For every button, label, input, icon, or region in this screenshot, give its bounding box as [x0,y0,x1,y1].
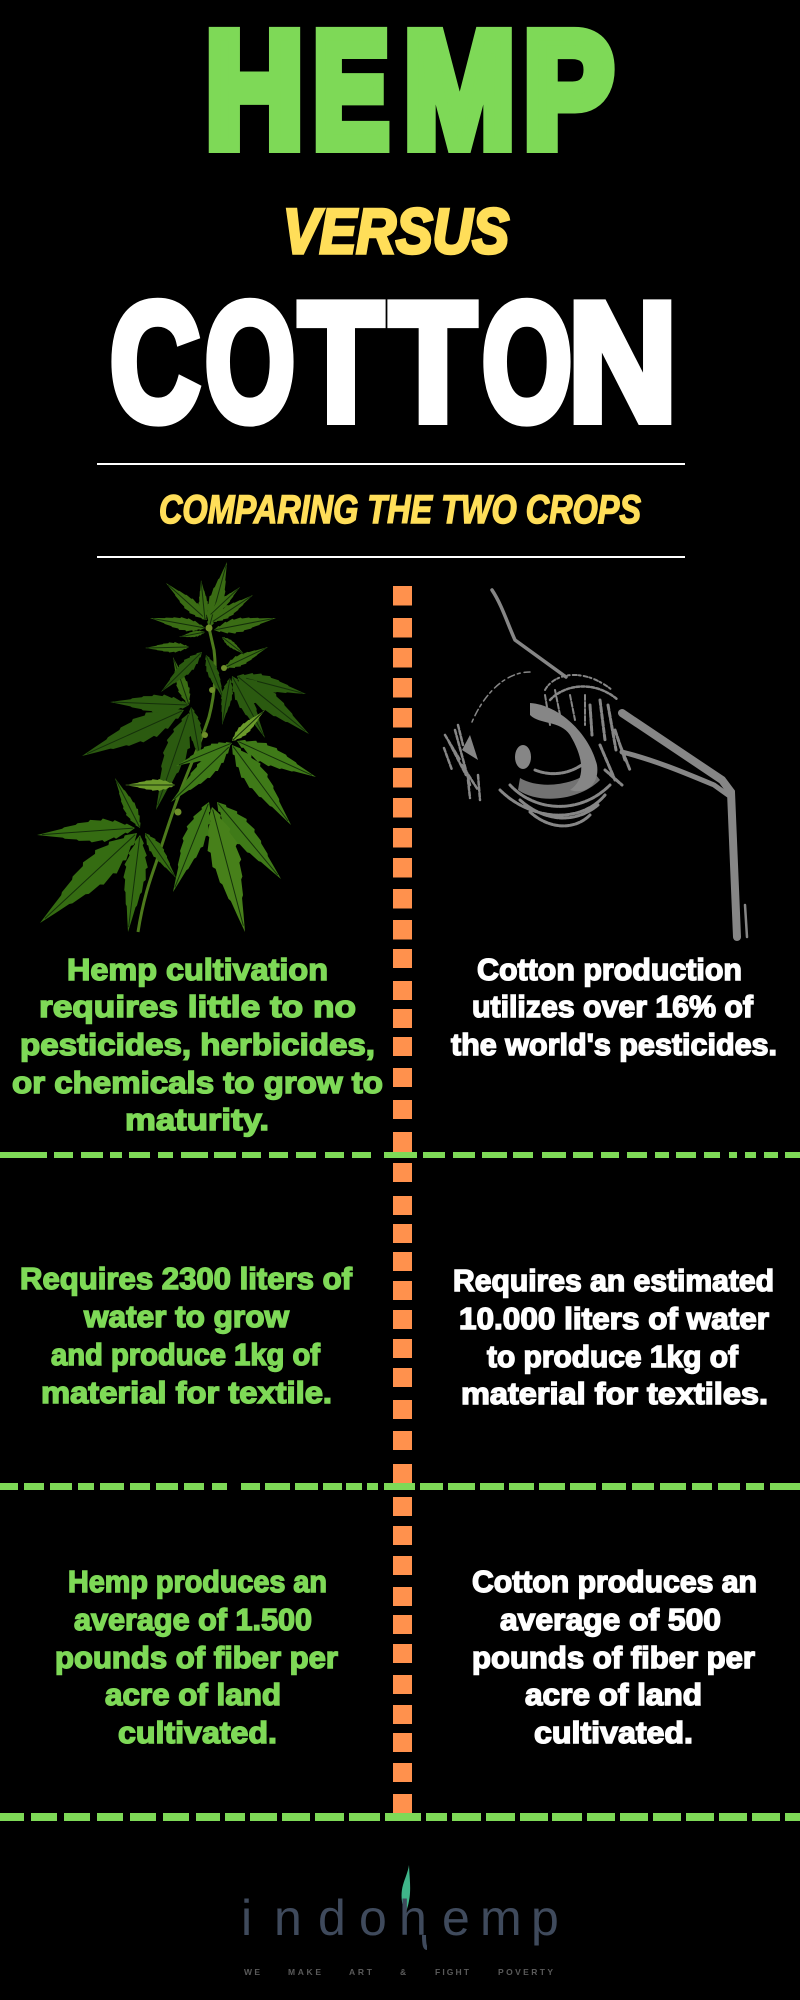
text: hemp fiber yield: pounds of fiber per [55,1640,338,1675]
text: cotton fiber yield [472,1564,757,1750]
logo tagline: WE [244,1967,260,1977]
logo tagline: MAKE [288,1967,321,1977]
green dashed row separator 2 [0,1483,800,1490]
divider: above subtitle [97,463,685,465]
logo: indohemp [241,1865,559,1977]
title: HEMP: H [206,0,304,181]
title: COTTON: C [110,268,200,456]
text: hemp pesticides: requires little to no [39,989,356,1024]
divider: below subtitle [97,556,685,558]
text: hemp pesticides: pesticides, herbicides, [20,1027,375,1062]
title: COTTON: N [568,268,677,456]
text: hemp pesticides: maturity. [125,1102,269,1137]
text: cotton pesticides: utilizes over 16% of [472,989,754,1024]
text: hemp water: water to grow [83,1299,290,1334]
text: hemp water [20,1261,353,1410]
title: HEMP: E [313,0,389,181]
text: cotton water: 10.000 liters of water [459,1301,769,1336]
text: hemp water: Requires 2300 liters of [20,1261,353,1296]
title: COTTON: T [390,268,476,456]
text: cotton fiber yield: cultivated. [534,1715,693,1750]
illustration: hemp plant [29,560,320,936]
title: VERSUS: VERSUS [283,197,509,267]
text: hemp water: and produce 1kg of [51,1337,321,1372]
icon: leaf [402,1865,410,1912]
text: hemp fiber yield: average of 1.500 [74,1602,312,1637]
title: HEMP: M [404,0,515,181]
logo wordmark: indohemp [241,1890,559,1946]
text: hemp fiber yield [55,1564,338,1750]
illustration: cotton boll [444,590,747,937]
text: cotton pesticides: the world's pesticides. [451,1027,777,1062]
logo tagline: FIGHT [435,1967,470,1977]
text: hemp pesticides: Hemp cultivation [67,952,328,987]
text: cotton water: to produce 1kg of [487,1339,739,1374]
text: cotton fiber yield: pounds of fiber per [472,1640,755,1675]
title: COTTON: T [299,268,383,456]
logo tagline: POVERTY [498,1967,553,1977]
title: HEMP [206,0,614,181]
title: COTTON: O [482,268,572,456]
text: hemp fiber yield: Hemp produces an [68,1564,327,1599]
green dashed row separator 3 [0,1813,800,1821]
text: cotton water: Requires an estimated [453,1263,774,1298]
text: hemp water: material for textile. [41,1375,332,1410]
text: hemp fiber yield: acre of land [105,1677,281,1712]
logo tagline: ART [349,1967,373,1977]
text: hemp pesticides [12,952,383,1137]
title: COTTON: O [205,268,295,456]
vertical orange dashed divider [393,586,412,1813]
text: cotton pesticides: Cotton production [477,952,742,987]
green dashed row separator 1 [0,1152,800,1158]
logo tagline: & [400,1967,406,1977]
title: COTTON [110,268,677,456]
text: cotton fiber yield: acre of land [525,1677,702,1712]
title: HEMP: P [524,0,614,181]
logo h tail [424,1935,427,1948]
text: hemp fiber yield: cultivated. [118,1715,277,1750]
text: cotton fiber yield: Cotton produces an [472,1564,757,1599]
text: cotton water: material for textiles. [461,1376,768,1411]
text: cotton water [453,1263,774,1411]
text: cotton pesticides [451,952,777,1062]
subtitle: COMPARING THE TWO CROPS [159,488,641,532]
text: cotton fiber yield: average of 500 [500,1602,721,1637]
text: hemp pesticides: or chemicals to grow to [12,1065,383,1100]
